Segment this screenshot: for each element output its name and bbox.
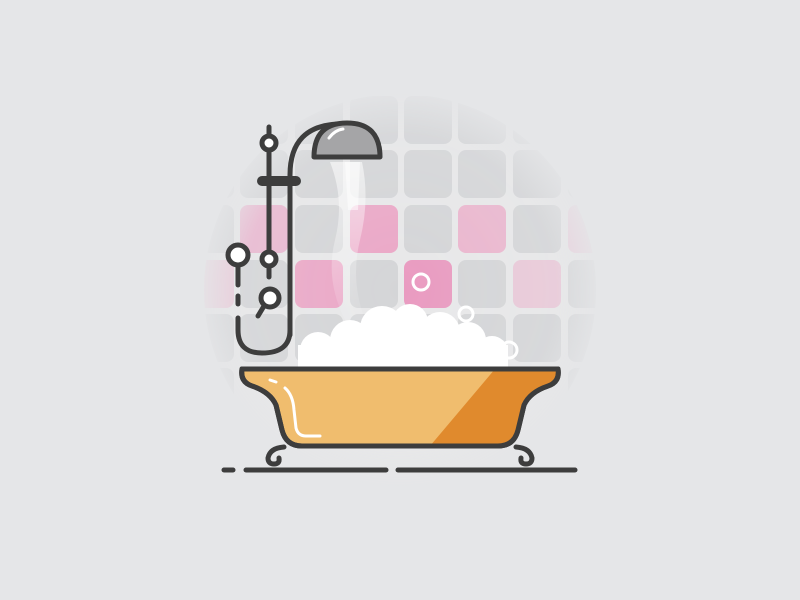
steam from shower — [330, 162, 366, 320]
bathtub — [242, 369, 558, 464]
foam bubbles — [298, 304, 508, 370]
shower head — [314, 123, 380, 157]
shower fixture — [228, 123, 380, 353]
illustration: bathtub with shower — [210, 114, 582, 472]
floor line — [224, 468, 575, 472]
tile wall — [210, 114, 582, 362]
tub highlight — [270, 380, 320, 436]
bubble: tile — [413, 274, 429, 290]
